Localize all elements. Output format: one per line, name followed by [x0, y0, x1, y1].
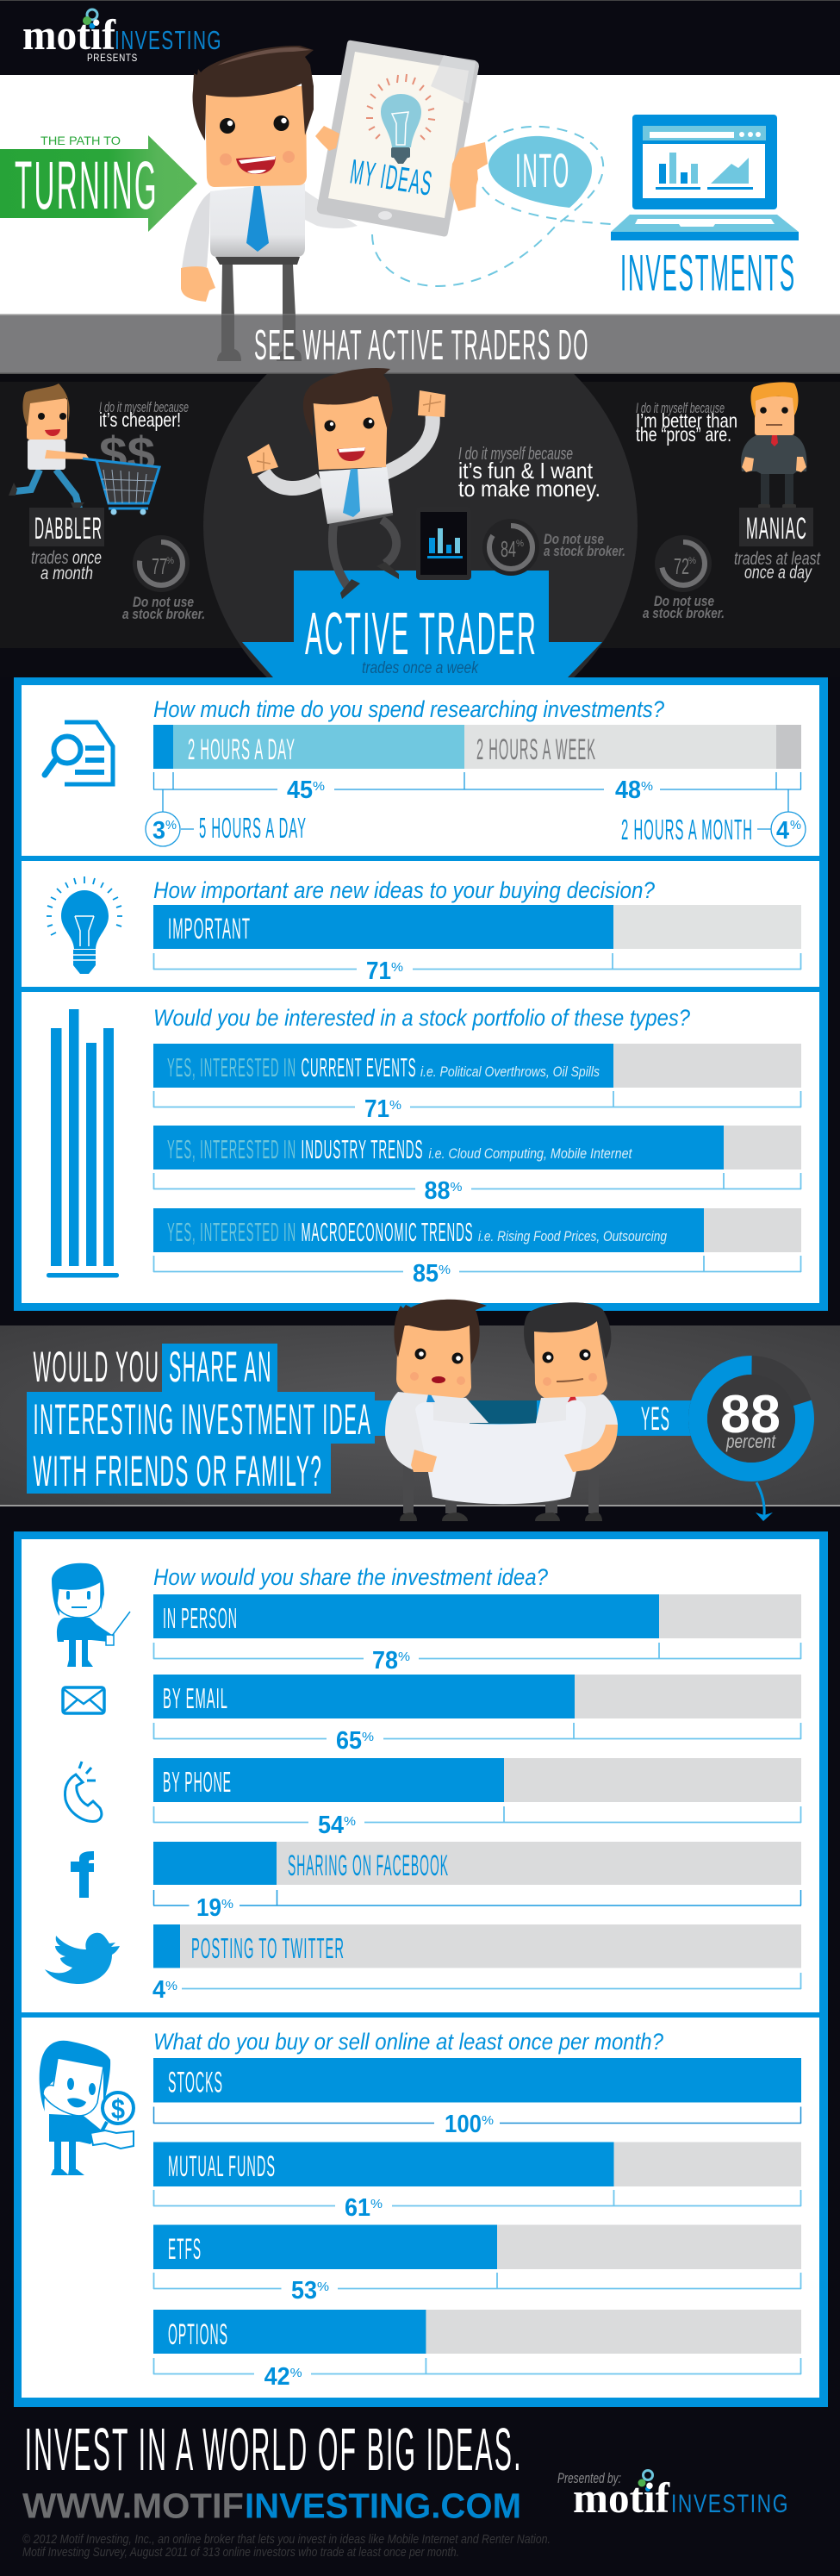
donut 77 percent: 77	[152, 553, 167, 579]
callout 4 percent: %	[790, 818, 801, 833]
green arrow	[0, 134, 197, 232]
bar: options: OPTIONS	[168, 2318, 228, 2351]
do not use 72: a stock broker.	[643, 605, 725, 621]
donut 72 percent: %	[688, 556, 696, 566]
value 71 percent: 71	[364, 1095, 389, 1123]
value 48 percent: 48	[615, 777, 641, 804]
hands	[742, 457, 806, 472]
trader types panel: DABBLER	[34, 512, 103, 546]
active trader reason: to make money.	[458, 476, 600, 502]
copyright	[22, 2532, 551, 2560]
arrow down	[756, 1482, 773, 1521]
bracket: etfs	[153, 2273, 801, 2289]
do not use 77: a stock broker.	[122, 606, 205, 622]
bracket: twitter	[182, 1973, 801, 1989]
cheeks	[220, 151, 295, 165]
website url	[22, 2486, 521, 2525]
value 61 percent: %	[370, 2197, 383, 2211]
value 19 percent: %	[221, 1897, 233, 1912]
bar: twitter	[153, 1924, 801, 1968]
value 78 percent: %	[398, 1650, 410, 1664]
callout 4 percent	[621, 789, 806, 846]
website url: INVESTING.COM	[245, 2486, 521, 2525]
active trader figure	[247, 368, 445, 599]
callout 3 percent: %	[165, 818, 177, 833]
tie	[343, 469, 360, 517]
mouths	[432, 1376, 583, 1383]
dabbler reason: I do it myself because	[99, 399, 189, 415]
bar: by phone: BY PHONE	[163, 1766, 232, 1798]
belt	[327, 510, 393, 527]
bracket: current events	[153, 1091, 801, 1107]
bar: macroeconomic trends	[153, 1208, 801, 1252]
bracket: options	[153, 2358, 801, 2374]
trades once a week: trades once a week	[362, 659, 479, 677]
maniac reason: the “pros” are.	[636, 423, 731, 446]
icon: man with pointer	[52, 1563, 130, 1667]
donut 77 percent	[133, 535, 190, 592]
bracket lines	[153, 953, 801, 970]
hero panel	[0, 41, 840, 316]
share question	[27, 1343, 375, 1495]
left tie	[426, 1394, 435, 1402]
bar: facebook: SHARING ON FACEBOOK	[288, 1849, 449, 1882]
mouth	[337, 447, 365, 461]
dabbler frequency: trades once	[31, 548, 102, 568]
left man hair	[394, 1300, 487, 1364]
connector bar	[375, 1400, 702, 1436]
value 85 percent: 85	[413, 1260, 439, 1288]
callout 3 percent	[146, 789, 307, 846]
value 42 percent: 42	[264, 2363, 290, 2391]
logo wordmark	[22, 10, 222, 59]
body	[49, 2114, 102, 2144]
footer logo	[573, 2470, 789, 2522]
hair	[750, 382, 798, 418]
value 65 percent: %	[362, 1730, 374, 1744]
icon: facebook	[71, 1851, 94, 1898]
eyes	[324, 417, 374, 431]
bar: current events: CURRENT EVENTS	[302, 1052, 417, 1082]
footer logo: INVESTING	[671, 2490, 789, 2518]
value 19 percent: 19	[196, 1894, 221, 1922]
bar: by phone	[153, 1758, 801, 1802]
right man head	[534, 1321, 607, 1398]
bar: etfs	[153, 2225, 801, 2269]
maniac reason: I do it myself because	[636, 400, 725, 416]
logo mark	[83, 9, 97, 29]
eyes	[220, 115, 289, 134]
fists	[247, 390, 445, 474]
cart	[83, 458, 159, 515]
mouth	[236, 156, 276, 174]
value 4 percent	[152, 1976, 177, 2004]
eyes	[760, 407, 788, 414]
bar: stocks: STOCKS	[168, 2067, 223, 2099]
tablet	[317, 41, 479, 236]
businessman with tablet	[181, 41, 488, 316]
bracket: stocks	[153, 2106, 801, 2124]
legs	[333, 520, 396, 586]
maniac figure	[741, 382, 807, 508]
value 61 percent: 61	[345, 2194, 370, 2222]
suit	[741, 435, 807, 474]
bar: mutual funds	[153, 2143, 801, 2186]
paper	[415, 1400, 586, 1504]
value 100 percent: 100	[445, 2111, 482, 2138]
do not use 84: a stock broker.	[544, 543, 625, 559]
face	[43, 2058, 103, 2116]
thumb	[315, 126, 339, 151]
green arrow: TURNING	[15, 147, 159, 223]
shoes	[758, 504, 796, 508]
bar: current events: i.e. Political Overthrows, Oil Spills	[420, 1063, 600, 1080]
belt	[215, 257, 300, 265]
eyes	[38, 413, 66, 420]
do not use 72	[643, 593, 725, 621]
lightbulb	[366, 74, 435, 164]
tablet: MY IDEAS	[348, 153, 435, 203]
dollar signs: $$	[99, 427, 155, 481]
shoes	[400, 1513, 602, 1521]
bar: by email: BY EMAIL	[163, 1682, 228, 1714]
question: How important are new ideas to your buying decision?	[153, 877, 655, 903]
value 42 percent: %	[290, 2366, 302, 2380]
bracket lines	[153, 772, 801, 789]
raised arms	[264, 415, 432, 489]
icon: man with magnifier	[40, 2041, 134, 2175]
percent word: percent	[725, 1431, 776, 1452]
mouth	[766, 424, 782, 426]
dabbler figure	[9, 384, 159, 515]
into bubble	[488, 136, 592, 208]
donut 84 percent: 84	[501, 536, 516, 562]
bar: twitter: POSTING TO TWITTER	[191, 1932, 345, 1964]
legs	[761, 471, 793, 506]
value 45 percent: %	[313, 779, 325, 794]
share band	[0, 1300, 840, 1521]
value 53 percent: 53	[291, 2277, 317, 2305]
legs	[403, 1465, 599, 1513]
value 65 percent: 65	[336, 1727, 362, 1755]
donut 77 percent: %	[166, 556, 174, 566]
bracket: in person	[153, 1643, 801, 1659]
cheeks	[410, 1372, 597, 1386]
value 71 percent: %	[391, 960, 403, 975]
left man shirt	[385, 1392, 488, 1469]
legs	[16, 470, 79, 508]
question: How would you share the investment idea?	[153, 1564, 548, 1590]
bar: by email	[153, 1675, 801, 1718]
podium	[242, 571, 602, 677]
portfolio section	[47, 1005, 801, 1288]
head	[205, 86, 307, 187]
question: How much time do you spend researching investments?	[153, 696, 664, 722]
do not use 77	[122, 594, 205, 622]
icon: document and magnifier	[45, 722, 113, 784]
value 4 percent: 4	[152, 1976, 165, 2004]
left arm	[182, 192, 210, 269]
podium: ACTIVE TRADER	[305, 600, 538, 667]
right tie	[568, 1395, 577, 1402]
value 71 percent: %	[389, 1098, 401, 1113]
two men with paper	[385, 1300, 618, 1521]
tie	[246, 185, 269, 252]
right man hair	[524, 1302, 611, 1364]
magnifier	[103, 2093, 134, 2124]
blue frame survey panel two	[14, 1531, 828, 2407]
bar: mutual funds: MUTUAL FUNDS	[168, 2150, 276, 2183]
fingers	[450, 142, 488, 211]
value 88 percent: 88	[424, 1177, 450, 1205]
gray band heading	[0, 314, 840, 374]
share question: WOULD YOU	[33, 1343, 160, 1391]
callout 4 percent: 4	[776, 817, 789, 845]
do not use 72: Do not use	[654, 593, 714, 609]
dabbler reason: it’s cheaper!	[99, 409, 181, 431]
bar: stocks	[153, 2058, 801, 2103]
bar: current events	[153, 1044, 801, 1088]
value 54 percent: %	[344, 1814, 356, 1829]
laptop icon	[611, 115, 799, 240]
head	[313, 396, 388, 470]
research section	[45, 696, 806, 846]
hair	[303, 368, 393, 437]
value 85 percent: %	[439, 1263, 451, 1277]
mini bar chart	[656, 153, 753, 190]
icon: telephone	[65, 1762, 102, 1821]
path to label: THE PATH TO	[40, 134, 121, 147]
stacked bar: 2 HOURS A WEEK	[476, 733, 596, 766]
footer logo: motif	[573, 2473, 670, 2522]
arm	[45, 450, 90, 459]
maniac frequency: once a day	[744, 563, 812, 583]
legs through band	[217, 314, 302, 361]
question: Would you be interested in a stock portfolio of these types?	[153, 1005, 690, 1031]
hands	[411, 1450, 590, 1472]
hair	[193, 46, 314, 140]
donut 84 percent: %	[516, 539, 524, 549]
tie	[771, 435, 778, 446]
dabbler label	[29, 508, 104, 546]
legs	[221, 265, 296, 316]
bar: in person: IN PERSON	[163, 1602, 238, 1634]
shirt	[319, 467, 393, 524]
bar: etfs: ETFS	[168, 2233, 202, 2266]
bracket: facebook	[153, 1890, 801, 1905]
header bar with logo	[0, 0, 840, 75]
right man shirt	[536, 1394, 618, 1456]
bracket: by email	[153, 1723, 801, 1739]
bar: industry trends: i.e. Cloud Computing, Mobile Internet	[429, 1145, 633, 1162]
value 48 percent: %	[641, 779, 653, 794]
value: 88	[720, 1385, 781, 1444]
head	[755, 396, 794, 435]
bar: current events: YES, INTERESTED IN	[167, 1052, 296, 1082]
into bubble: INTO	[515, 143, 570, 197]
maniac label	[739, 508, 813, 546]
head	[27, 398, 67, 440]
dark tablet	[416, 507, 471, 580]
legs	[51, 2141, 84, 2175]
dabbler reason	[99, 399, 189, 431]
logo wordmark: motif	[22, 10, 116, 59]
bracket: macroeconomic trends	[153, 1256, 801, 1272]
presented by: Presented by:	[557, 2470, 621, 2486]
value 78 percent: 78	[372, 1647, 398, 1675]
icon: envelope	[63, 1687, 104, 1713]
bar: facebook	[153, 1842, 801, 1885]
buy or sell section	[40, 2029, 801, 2391]
sharing section	[45, 1563, 801, 2004]
value 54 percent: 54	[318, 1812, 344, 1839]
icon: lightbulb	[47, 876, 122, 974]
dashed route	[372, 127, 611, 286]
value 53 percent: %	[317, 2280, 329, 2294]
active trader reason: it’s fun & I want	[458, 458, 594, 483]
value 100 percent: %	[482, 2113, 494, 2128]
icon: bar columns	[47, 1009, 119, 1277]
bar: IMPORTANT	[168, 913, 251, 945]
maniac frequency	[734, 549, 821, 583]
share band: INTERESTING INVESTMENT IDEA	[33, 1395, 372, 1444]
donut 72 percent: 72	[674, 553, 689, 579]
donut 72 percent	[655, 535, 712, 592]
bar: industry trends	[153, 1126, 801, 1169]
maniac reason: I’m better than	[636, 409, 737, 432]
value 4 percent: %	[165, 1979, 177, 1993]
do not use 84: Do not use	[544, 531, 604, 547]
donut 84 percent	[482, 519, 539, 576]
share band: YES	[641, 1401, 670, 1438]
logo wordmark: INVESTING	[115, 25, 222, 55]
copyright: © 2012 Motif Investing, Inc., an online broker that lets you invest in ideas like Mobile Internet and Renter Nation.	[22, 2532, 551, 2547]
bar: macroeconomic trends: MACROECONOMIC TRENDS	[302, 1217, 474, 1247]
bar: macroeconomic trends: i.e. Rising Food Prices, Outsourcing	[478, 1228, 667, 1244]
dabbler frequency: a month	[40, 564, 93, 583]
bar: macroeconomic trends: YES, INTERESTED IN	[167, 1217, 296, 1247]
left man head	[396, 1325, 471, 1398]
hair	[22, 384, 70, 427]
bar: in person	[153, 1594, 801, 1638]
value 88 percent: %	[450, 1180, 462, 1194]
new ideas section	[47, 876, 801, 985]
stacked bar: 2 HOURS A DAY	[188, 733, 296, 766]
do not use 77: Do not use	[133, 594, 194, 610]
right forearm	[564, 1425, 618, 1472]
bracket: mutual funds	[153, 2190, 801, 2206]
sleeve	[303, 190, 358, 228]
website url: WWW.MOTIF	[22, 2486, 244, 2525]
stacked bar	[153, 725, 801, 769]
dabbler frequency	[31, 548, 102, 583]
left hand	[181, 266, 215, 302]
share question: WITH FRIENDS OR FAMILY?	[33, 1447, 322, 1495]
bar: industry trends: YES, INTERESTED IN	[167, 1134, 296, 1164]
shirt	[28, 440, 65, 470]
maniac reason	[636, 400, 737, 446]
shirt	[210, 184, 305, 257]
bracket: industry trends	[153, 1173, 801, 1189]
do not use 84	[544, 531, 625, 559]
hair	[40, 2041, 110, 2111]
value 45 percent: 45	[287, 777, 313, 804]
active trader reason: I do it myself because	[458, 445, 573, 464]
eyes	[415, 1348, 591, 1363]
footer	[22, 2416, 789, 2560]
shoes	[340, 562, 399, 599]
shoes	[9, 483, 84, 508]
active trader reason	[458, 445, 600, 502]
bar: industry trends: INDUSTRY TRENDS	[302, 1134, 424, 1164]
hands	[90, 2130, 134, 2149]
question: What do you buy or sell online at least once per month?	[153, 2029, 663, 2055]
share question: SHARE AN	[169, 1343, 272, 1391]
callout 3 percent: 3	[152, 817, 165, 845]
value 71 percent: 71	[366, 957, 391, 985]
icon: twitter bird	[45, 1933, 120, 1984]
presents: PRESENTS	[87, 53, 138, 64]
blue frame survey panel one	[14, 677, 828, 1311]
bracket: by phone	[153, 1806, 801, 1823]
research section: 5 HOURS A DAY	[199, 812, 307, 844]
bar: options	[153, 2310, 801, 2354]
mouth	[45, 429, 60, 436]
bar	[153, 905, 801, 949]
copyright: Motif Investing Survey, August 2011 of 313 online investors who trade at least once per month.	[22, 2545, 459, 2560]
donut 88 percent	[685, 1352, 818, 1485]
trader types panel	[0, 368, 840, 677]
icon: man with magnifier: $	[111, 2093, 125, 2124]
